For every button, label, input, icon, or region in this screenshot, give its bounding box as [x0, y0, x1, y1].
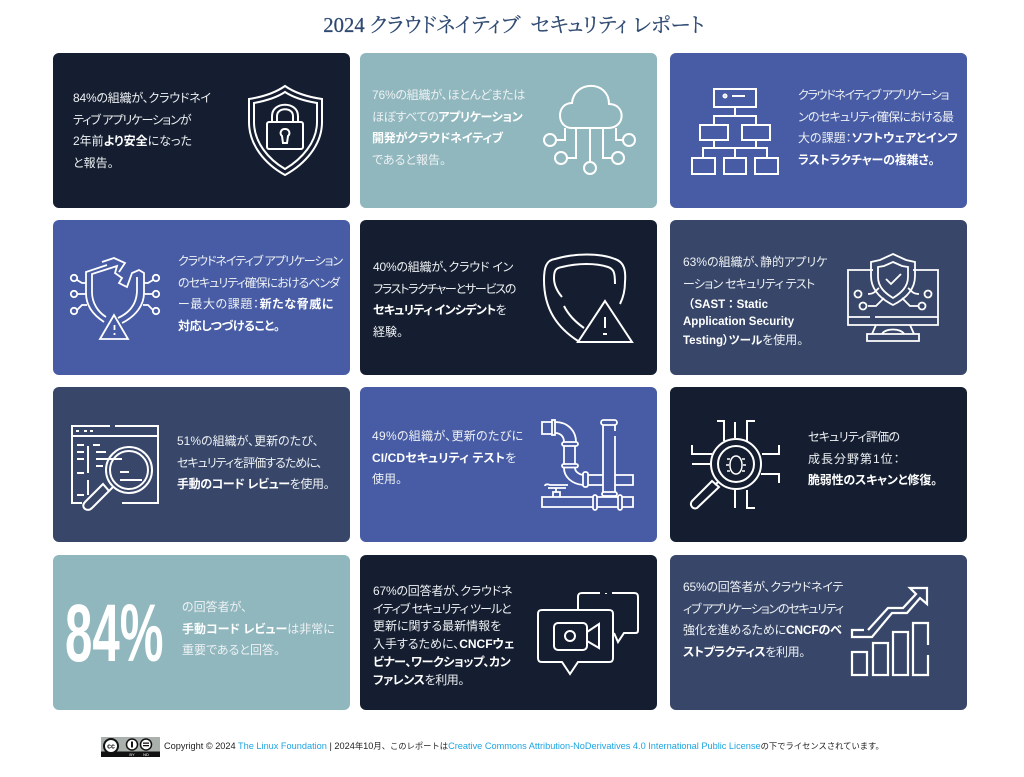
icon: pipes [541, 419, 634, 511]
text: vendor challenge, new threats: ー最大の課題：新たな脅威に [178, 297, 334, 311]
text: biggest challenge, complexity: クラウドネイティブ アプリケーショ [798, 88, 948, 102]
icon: Creative Commons badge [101, 737, 160, 757]
panel: 65% CNCF best practices [670, 555, 967, 710]
text: biggest challenge, complexity: ンのセキュリティ確保における最 [798, 110, 953, 124]
text: 84% respondents: 手動コード レビューは非常に [182, 622, 335, 636]
text: 65% CNCF best practices [683, 580, 844, 659]
text: 84% safer: 84%の組織が、クラウドネイ [73, 91, 211, 105]
panel: vendor challenge, new threats [53, 220, 350, 375]
text: 76% cloud native: 開発がクラウドネイティブ [372, 131, 503, 145]
text: biggest challenge, complexity [798, 88, 958, 167]
text: 49% CI/CD: 使用。 [372, 472, 402, 486]
text: vulnerability scanning: セキュリティ評価の [808, 430, 899, 444]
icon: monitor with shield [847, 253, 939, 342]
text: 63% SAST: Testing）ツールを使用。 [683, 333, 803, 347]
text: 84% respondents [182, 600, 335, 657]
icon: code window with magnifier [71, 425, 159, 511]
text: 40% incidents: 40%の組織が、クラウド イン [373, 260, 513, 274]
text: 84% respondents: の回答者が、 [182, 600, 247, 614]
footer copyright: Copyright © 2024 The Linux Foundation | 2024年10月、このレポートはCreative Commons Attribution-NoDerivatives 4.0 International Public Licenseの下でライセンスされています。 [164, 741, 884, 751]
text: 63% SAST: （SAST：Static [683, 299, 768, 311]
icon: Creative Commons badge: cc [107, 744, 115, 750]
text: 51% manual code review: 手動のコード レビューを使用。 [177, 477, 329, 491]
text: 76% cloud native [372, 88, 525, 167]
text: vulnerability scanning [808, 430, 937, 487]
text: 65% CNCF best practices: ィブ アプリケーションのセキュリティ [683, 602, 843, 616]
text: vulnerability scanning: 脆弱性のスキャンと修復。 [808, 473, 937, 487]
text: 67% CNCF events: 67%の回答者が、クラウドネ [373, 584, 512, 598]
text: 67% CNCF events: ファレンスを利用。 [373, 673, 464, 687]
text: 49% CI/CD [372, 429, 523, 486]
text: biggest challenge, complexity: 大の課題：ソフトウェアとインフ [798, 131, 958, 145]
panel: 84% manual review important [53, 555, 350, 710]
text: 65% CNCF best practices: 65%の回答者が、クラウドネイテ [683, 580, 843, 594]
text: 49% CI/CD: CI/CDセキュリティ テストを [372, 451, 516, 465]
text: vendor challenge, new threats [178, 254, 343, 333]
panel: 63% SAST [670, 220, 967, 375]
text: 67% CNCF events: ビナー、ワークショップ、カン [373, 655, 510, 669]
panel: vulnerability scanning [670, 387, 967, 542]
text: 63% SAST: Application Security [683, 316, 794, 328]
text: vendor challenge, new threats: 対応しつづけること。 [178, 319, 279, 333]
big number: 84%: 84% [65, 588, 163, 679]
panel: 76% cloud native [360, 53, 657, 208]
text: 67% CNCF events: 入手するために、CNCFウェ [373, 637, 515, 651]
text: 67% CNCF events [373, 584, 515, 687]
text: 40% incidents: セキュリティ インシデントを [373, 303, 506, 317]
text: 51% manual code review [177, 434, 329, 491]
text: 49% CI/CD: 49%の組織が、更新のたびに [372, 429, 523, 443]
text: 76% cloud native: ほぼすべてのアプリケーション [372, 110, 522, 124]
icon: Creative Commons badge: BY [129, 752, 135, 757]
text: vendor challenge, new threats: のセキュリティ確保におけるベンダ [178, 276, 339, 290]
icon: cloud with circuits [543, 84, 636, 175]
text: 84% respondents: 重要であると回答。 [182, 643, 280, 657]
text: 67% CNCF events: イティブ セキュリティ ツールと [373, 602, 511, 616]
text: 67% CNCF events: 更新に関する最新情報を [373, 619, 501, 633]
text: 40% incidents [373, 260, 516, 339]
text: 40% incidents: フラストラクチャーとサービスの [373, 282, 515, 296]
text: 84% safer: ティブ アプリケーションが [73, 113, 191, 127]
icon: Creative Commons badge: ND [143, 752, 149, 757]
icon: shield with warning triangle [543, 254, 634, 343]
text: biggest challenge, complexity: ラストラクチャーの複雑さ。 [798, 153, 934, 167]
panel: 67% CNCF events [360, 555, 657, 710]
panel: 49% CI/CD [360, 387, 657, 542]
text: 84% safer [73, 91, 211, 170]
panel: biggest challenge, complexity [670, 53, 967, 208]
text: vulnerability scanning: 成長分野第1位： [808, 452, 901, 466]
panel: 40% incidents [360, 220, 657, 375]
text: 76% cloud native: 76%の組織が、ほとんどまたは [372, 88, 525, 102]
text: 84% safer: と報告。 [73, 156, 114, 170]
text: 63% SAST: ーション セキュリティ テスト [683, 277, 814, 291]
icon: broken shield with warning [70, 257, 160, 340]
panel: 84% safer [53, 53, 350, 208]
title: 2024 クラウドネイティブ セキュリティ レポート [323, 15, 705, 37]
icon: video chat bubbles [537, 592, 639, 676]
panel: 51% manual code review [53, 387, 350, 542]
text: 51% manual code review: 51%の組織が、更新のたび、 [177, 434, 319, 448]
text: 51% manual code review: セキュリティを評価するために、 [177, 456, 321, 470]
text: 76% cloud native: であると報告。 [372, 153, 446, 167]
icon: shield with padlock [248, 84, 323, 176]
text: 63% SAST [683, 255, 827, 347]
text: 84% safer: 2年前より安全になった [73, 134, 192, 148]
text: 65% CNCF best practices: 強化を進めるためにCNCFのベ [683, 623, 842, 637]
icon: growth bar chart with arrow [850, 586, 930, 676]
icon: hierarchy diagram [691, 88, 779, 175]
icon: magnifier with bug [690, 420, 780, 510]
text: 63% SAST: 63%の組織が、静的アプリケ [683, 255, 827, 269]
text: vendor challenge, new threats: クラウドネイティブ アプリケーション [178, 254, 342, 268]
text: 40% incidents: 経験。 [373, 325, 403, 339]
text: 65% CNCF best practices: ストプラクティスを利用。 [683, 645, 805, 659]
